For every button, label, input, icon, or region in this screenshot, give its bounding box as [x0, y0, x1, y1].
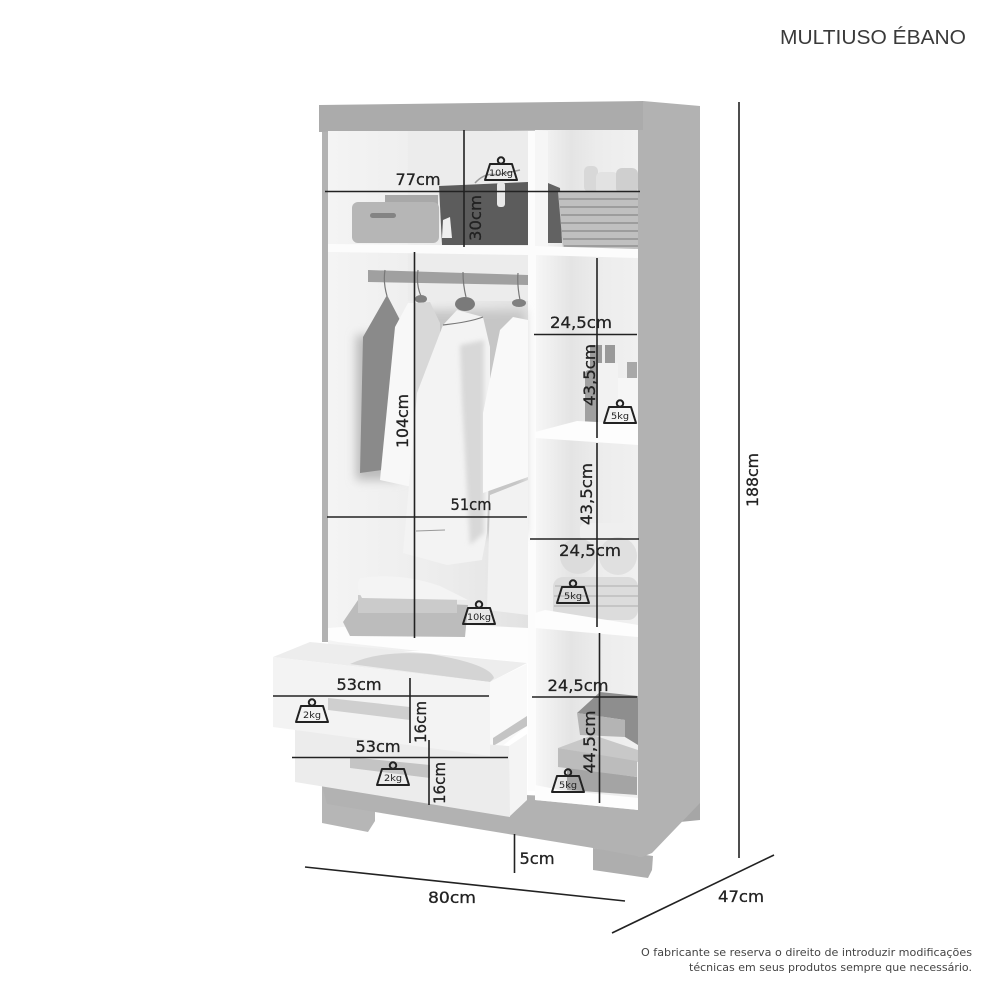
basket: right with rolled towels: [558, 166, 638, 249]
label: 53cm lower drawer: 53cm: [356, 737, 400, 756]
upper drawer handle: [328, 698, 410, 720]
icon: weight 2kg upper drawer: [296, 699, 328, 722]
icon: weight 10kg lower shelf: 10kg: [467, 613, 491, 623]
wardrobe illustration: [273, 101, 700, 878]
lower drawer side: [509, 734, 527, 817]
label: 16cm upper drawer: 16cm: [411, 701, 430, 743]
label: 16cm lower drawer: 16cm: [430, 762, 449, 804]
label: 51cm: 51cm: [450, 495, 492, 514]
lower drawer front: [295, 730, 510, 817]
drawer interior: [273, 642, 527, 682]
icon: weight 5kg middle cell: [557, 580, 589, 603]
label: 47cm depth: 47cm: [718, 887, 764, 906]
top panel: [319, 101, 643, 132]
icon: weight 5kg upper cell: 5kg: [611, 412, 629, 422]
label: 44,5cm: 44,5cm: [580, 710, 599, 774]
lower-left shelf: [328, 622, 528, 663]
bottles: [585, 345, 638, 432]
icon: weight 10kg lower shelf: [463, 601, 495, 624]
dark garment: [360, 295, 400, 473]
label: 77cm width: 77cm: [396, 170, 440, 189]
top-right shelf: [535, 246, 638, 258]
dimension lines: [273, 102, 774, 933]
short sleeve robe: [483, 317, 528, 493]
icon: weight 2kg upper drawer: 2kg: [303, 711, 321, 721]
upper drawer front: [273, 657, 490, 756]
label: 24,5cm lower: 24,5cm: [548, 676, 608, 695]
drawer side: [490, 664, 527, 756]
icon: weight 5kg middle cell: 5kg: [564, 592, 582, 602]
label: 24,5cm upper: 24,5cm: [550, 313, 612, 332]
icon: weight 10kg top: [485, 157, 517, 180]
lower drawer handle: [350, 757, 430, 778]
folded towels on lower shelf: [343, 576, 468, 637]
bottom right shelf: [535, 785, 638, 810]
icon: weight 5kg upper cell: [604, 400, 636, 423]
icon: weight 10kg top: 10kg: [489, 169, 513, 179]
label: 53cm upper drawer: 53cm: [336, 675, 382, 694]
left compartment back: [328, 131, 528, 651]
icon: weight 2kg lower drawer: [377, 762, 409, 785]
soft shadow behind garments: [356, 335, 400, 480]
plinth and legs: [322, 786, 700, 878]
top-left shelf: [328, 244, 528, 255]
third right shelf: [535, 610, 638, 637]
disclaimer note: [641, 946, 972, 974]
label: 80cm width: 80cm: [428, 888, 476, 907]
white shirt: [380, 303, 414, 487]
dark bag: [439, 170, 562, 245]
right compartment back: [535, 130, 638, 810]
disclaimer note: técnicas em seus produtos sempre que necessário.: [689, 961, 972, 974]
label: 104cm: 104cm: [393, 394, 412, 448]
basket: left: [352, 195, 439, 243]
slide rail: [493, 716, 527, 746]
title: MULTIUSO ÉBANO: [780, 26, 966, 49]
hanging rail: [368, 270, 528, 285]
stacked boxes: [558, 692, 638, 795]
hangers: [384, 270, 520, 300]
icon: weight 5kg lower cell: 5kg: [559, 781, 577, 791]
label: 5cm foot: 5cm: [520, 849, 554, 868]
rolled towels: [553, 523, 638, 620]
label: 188cm height: 188cm: [743, 453, 762, 507]
label: 24,5cm middle: 24,5cm: [559, 541, 621, 560]
left edge: [322, 132, 328, 642]
icon: weight 5kg lower cell: [552, 769, 584, 792]
label: 43,5cm middle: 43,5cm: [577, 463, 596, 525]
second right shelf: [535, 421, 638, 445]
disclaimer note: O fabricante se reserva o direito de introduzir modificações: [641, 946, 972, 959]
clothes: [356, 270, 528, 615]
label: 43,5cm upper: 43,5cm: [580, 344, 599, 406]
centre divider: [528, 131, 536, 791]
long robe: [403, 310, 490, 565]
icon: weight 2kg lower drawer: 2kg: [384, 774, 402, 784]
side panel: [638, 101, 700, 857]
label: 30cm height: 30cm: [466, 195, 485, 241]
